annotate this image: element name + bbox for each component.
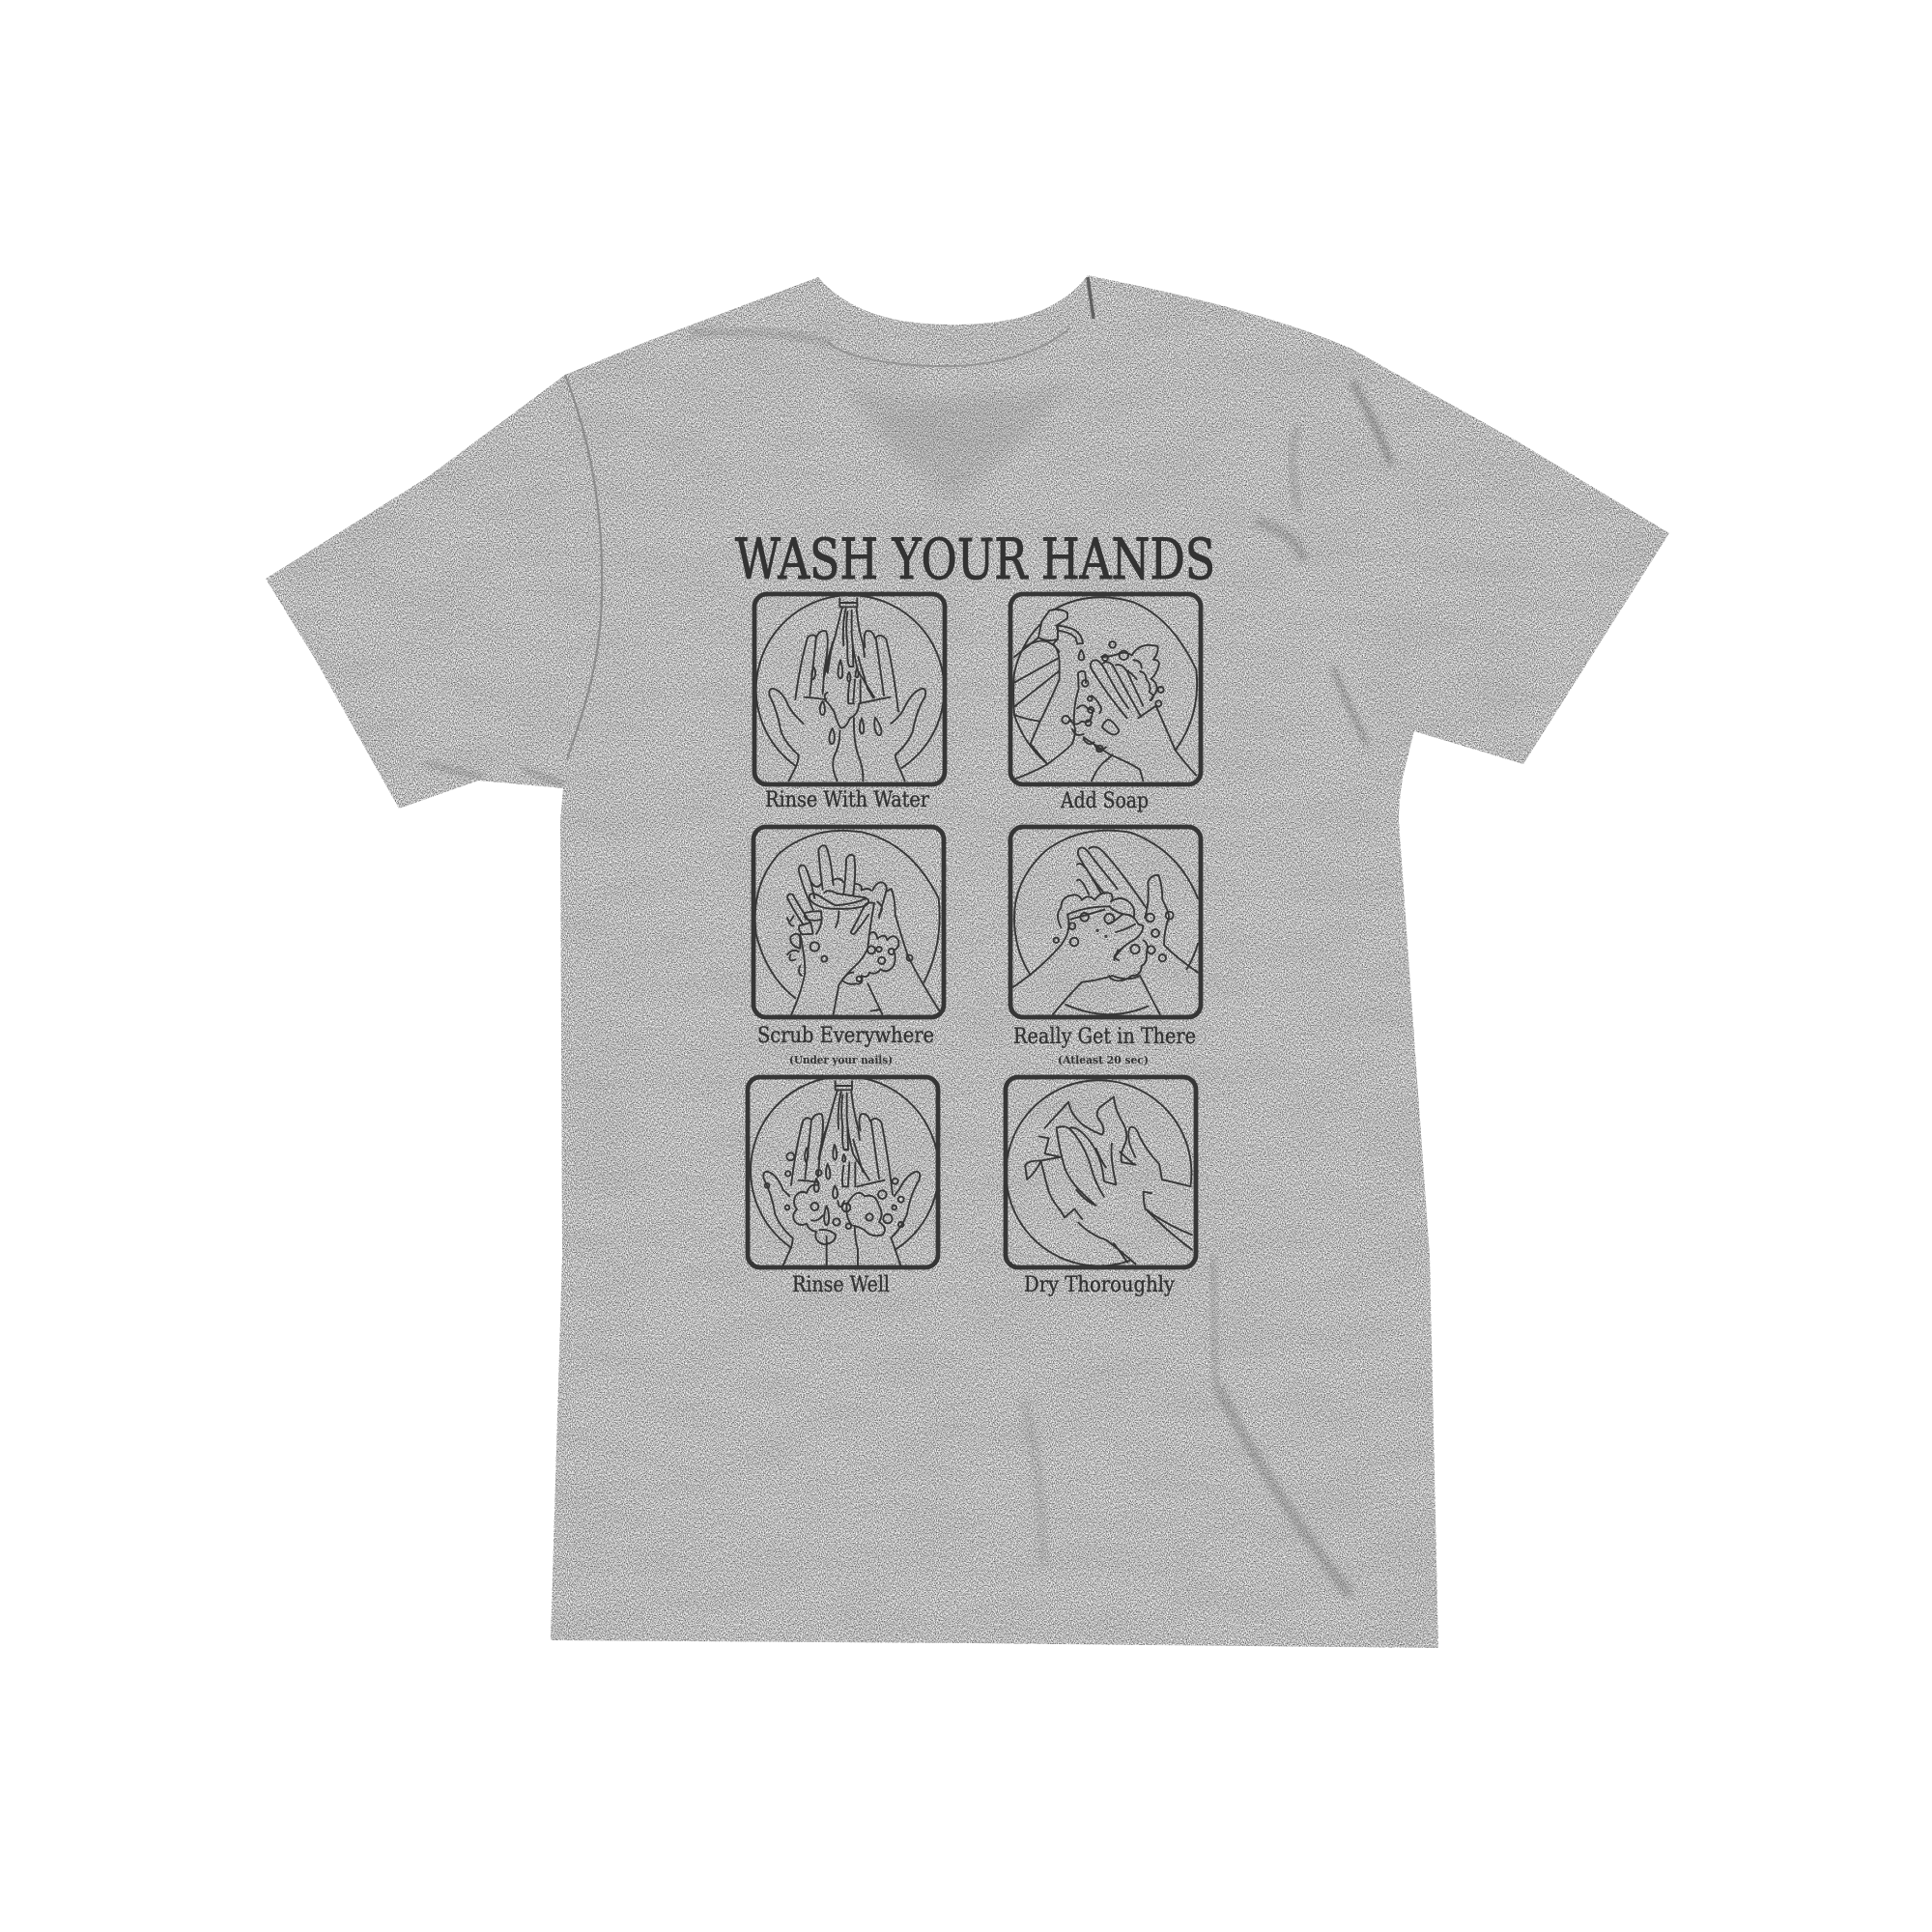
title: WASH YOUR HANDS xyxy=(735,526,1215,592)
note: at least 20 sec: (Atleast 20 sec) xyxy=(1058,1054,1149,1066)
label: really get in there: Really Get in There xyxy=(1013,1025,1196,1049)
icon: hands drying with towel xyxy=(1007,1080,1192,1265)
icon: rinsing soapy hands xyxy=(751,1076,939,1265)
t-shirt body xyxy=(266,275,1669,1648)
panel: dry thoroughly xyxy=(1006,1077,1196,1297)
label: rinse well: Rinse Well xyxy=(792,1273,890,1297)
panel: add soap xyxy=(1010,594,1201,813)
icon: hands lathering back of hand xyxy=(1013,831,1198,1014)
label: add soap: Add Soap xyxy=(1060,789,1149,813)
panel: scrub everywhere xyxy=(753,827,944,1066)
label: scrub everywhere: Scrub Everywhere xyxy=(757,1024,934,1048)
icon: soap dispenser and lathered hands xyxy=(1013,597,1197,781)
icon: hands scrubbing xyxy=(755,831,940,1014)
panel: rinse with water xyxy=(754,594,945,812)
label: rinse with water: Rinse With Water xyxy=(765,788,930,812)
label: dry thoroughly: Dry Thoroughly xyxy=(1024,1273,1176,1297)
infographic t-shirt graphic xyxy=(266,275,1669,1648)
icon: hands under running water xyxy=(756,595,944,781)
panel: really get in there xyxy=(1010,827,1201,1066)
note: under your nails: (Under your nails) xyxy=(789,1054,893,1066)
panel: rinse well xyxy=(748,1076,939,1297)
